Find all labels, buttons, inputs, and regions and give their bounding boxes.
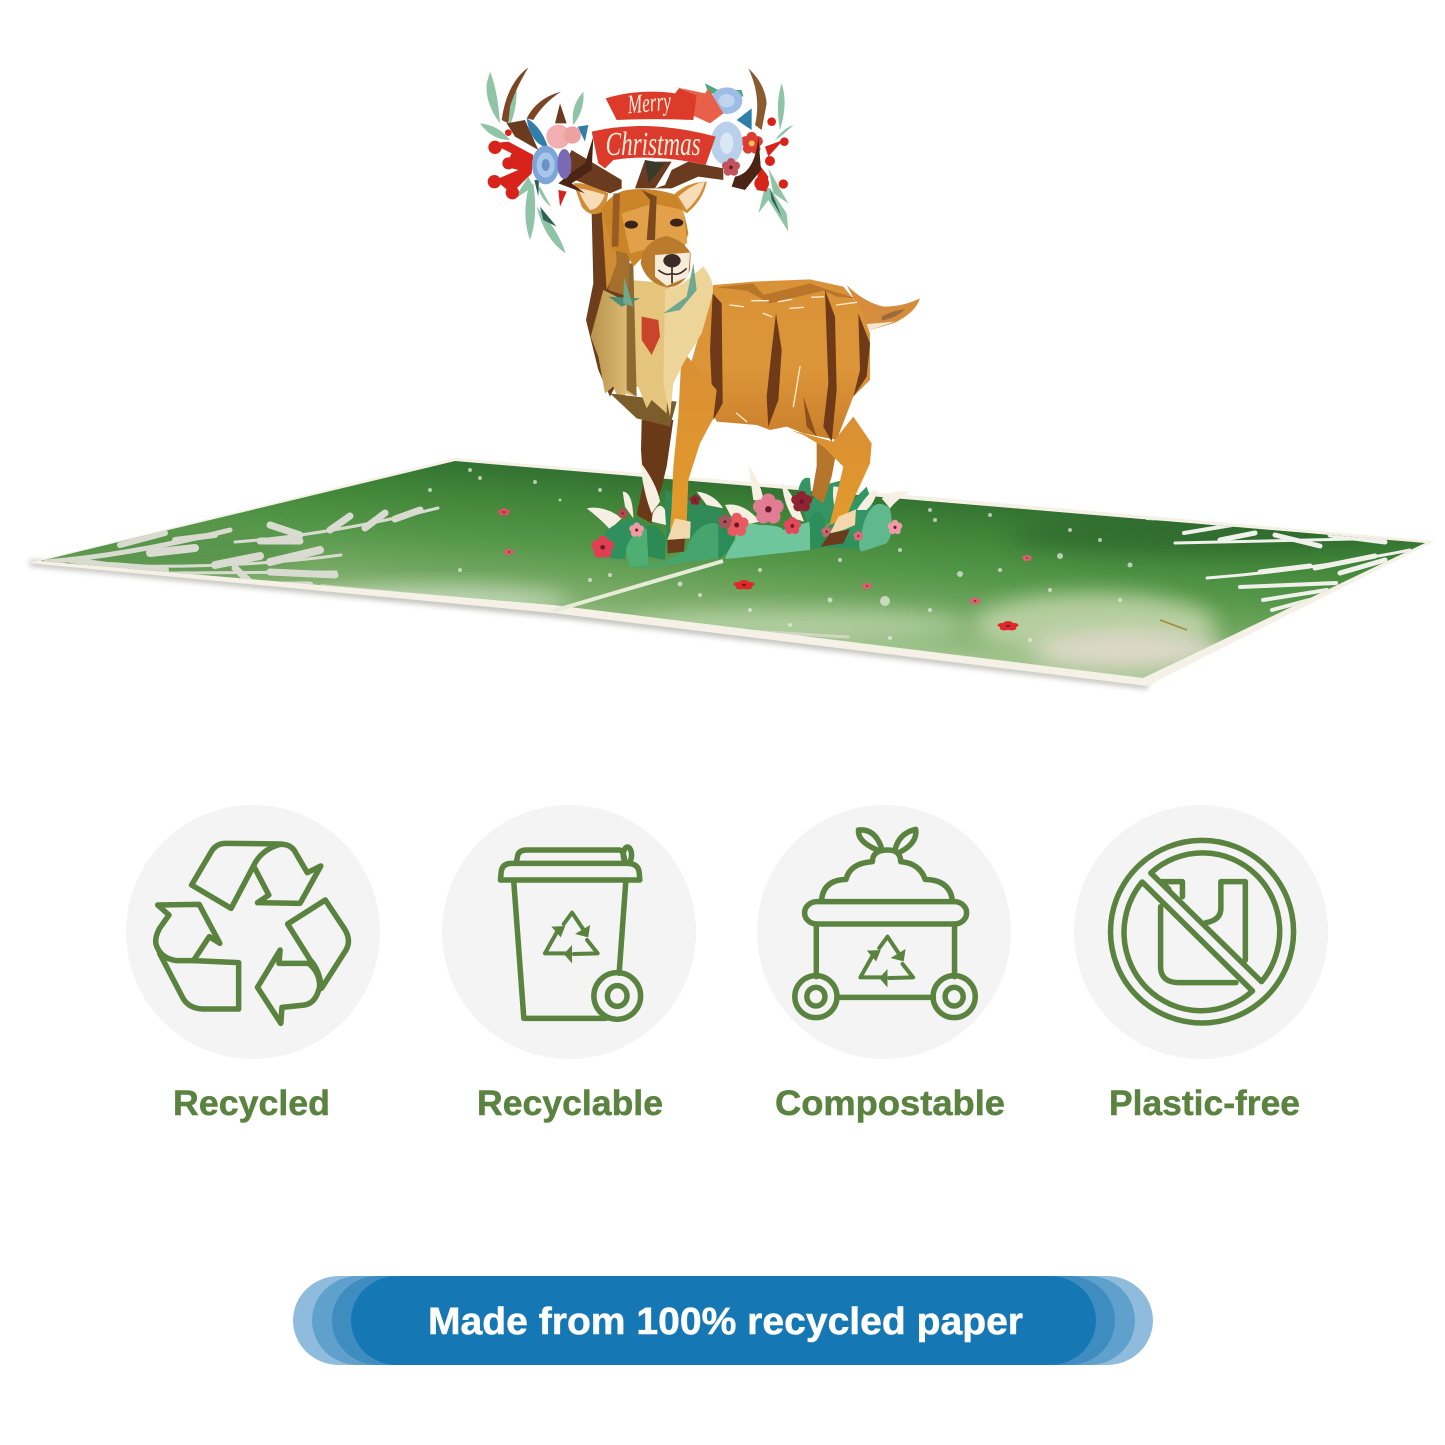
left prong long: [502, 67, 528, 123]
dark patch back right: [1010, 515, 1370, 555]
blue rose right lower: [711, 122, 743, 165]
pink rose left: [546, 125, 581, 149]
back dark bushes: [665, 490, 727, 540]
red berries left: [488, 129, 567, 207]
white spots: [730, 297, 857, 422]
fold slits: [710, 293, 723, 420]
white blade near hoof: [652, 506, 666, 525]
teal main lobe: [725, 522, 810, 559]
upper mid tine: [555, 103, 567, 123]
head fold: [612, 193, 620, 247]
green wash: [40, 461, 1425, 678]
pill layer main: [351, 1276, 1096, 1365]
pale glow on right panel: [973, 593, 1217, 657]
white blade front of far leg: [640, 462, 660, 513]
christmas text: Christmas: [606, 126, 701, 163]
mane cream left: [591, 290, 635, 403]
rear hoof cream: [830, 509, 856, 533]
nose: [663, 254, 681, 267]
ribbon tail: [677, 87, 723, 123]
banner: recycled paper: [293, 1276, 1153, 1365]
pill layer outer: [293, 1276, 1153, 1365]
card paper: [28, 458, 1435, 686]
left antler fork: [507, 120, 538, 150]
green patch left corner: [40, 525, 300, 575]
pale wash near centre: [630, 609, 970, 641]
face fold: [642, 190, 657, 240]
blue rose right top: [705, 83, 743, 114]
dark centre: [645, 160, 665, 183]
dark tines: [732, 137, 761, 190]
pop-up card base: [27, 458, 1434, 692]
right teal lobe: [859, 504, 892, 552]
banner text: Made from 100% recycled paper: [428, 1301, 1023, 1343]
snow dots: [428, 468, 1132, 642]
flowers: [591, 536, 614, 558]
icon: no plastic bag: [1111, 840, 1294, 1023]
pill layer three: [332, 1276, 1115, 1365]
label: Recycled: [173, 1084, 330, 1123]
circle: [757, 805, 1011, 1059]
red berries right: [740, 117, 789, 192]
label: Recyclable: [477, 1084, 663, 1123]
strip behind rear hoof: [825, 530, 863, 548]
label: Plastic-free: [1109, 1084, 1300, 1123]
circle: [442, 805, 696, 1059]
tail: [847, 285, 920, 331]
right pink flower: [722, 158, 740, 176]
chest fold: [627, 263, 637, 397]
far front leg: [637, 420, 673, 523]
right prong: [748, 68, 767, 130]
neck stripe outer: [602, 207, 617, 290]
left leaves: [480, 72, 584, 253]
far legs: [637, 420, 837, 523]
mane dark back: [586, 210, 630, 397]
body: [690, 279, 870, 440]
blue leaves: [527, 118, 548, 148]
ear right inner: [678, 182, 705, 210]
leaves: [608, 297, 640, 307]
circle: [126, 805, 380, 1059]
left dark lobe: [605, 518, 647, 559]
merry banner: [606, 88, 697, 120]
near hoof brown: [667, 539, 685, 553]
ear left inner: [578, 188, 605, 210]
head: [602, 189, 688, 267]
card nick: [1160, 620, 1187, 630]
printed flowers: [498, 508, 1032, 630]
circle: [1074, 805, 1328, 1059]
icon: recycling arrows: [156, 843, 348, 1023]
neck stripe: [608, 207, 630, 297]
near hoof cream: [667, 518, 691, 540]
back white blades: [587, 508, 622, 529]
dark tine left: [558, 137, 593, 193]
rear hoof brown: [821, 529, 850, 547]
tail mark: [882, 309, 905, 321]
mouth: [658, 267, 687, 283]
tail underside: [867, 322, 895, 331]
christmas banner: [592, 126, 716, 168]
teal lobe left: [626, 528, 648, 567]
centre antler tines: [635, 160, 723, 188]
pale wash front left: [310, 586, 570, 614]
card printed scene: [40, 461, 1425, 678]
chest flap centre: [630, 280, 670, 413]
pill layer two: [312, 1276, 1135, 1365]
near hind leg: [790, 417, 872, 527]
dark lobe right: [809, 512, 826, 549]
eyes: [625, 221, 638, 229]
snout white: [655, 253, 690, 286]
icon: compost cart: [795, 829, 975, 1018]
green main lobe: [630, 523, 718, 567]
icon: wheelie bin: [500, 847, 641, 1019]
front foliage: [591, 491, 902, 567]
ear left: [573, 183, 608, 214]
blue rose left: [532, 146, 571, 184]
red flower: [642, 317, 660, 355]
beige patch: [1033, 630, 1223, 670]
label: Compostable: [775, 1084, 1005, 1123]
centre fold: [553, 561, 723, 611]
left prong short: [527, 92, 561, 120]
face light: [622, 203, 687, 253]
garland: [608, 263, 697, 355]
foliage behind legs: [587, 465, 909, 547]
badge: plastic-free: [1074, 805, 1328, 1123]
merry text: Merry: [626, 86, 672, 119]
body slits and white spots: [710, 290, 870, 442]
far hind leg: [812, 440, 837, 503]
snow branches right: [1147, 518, 1410, 610]
card shadow: [30, 560, 1150, 689]
antlers and wreath: [480, 67, 793, 253]
body top lip: [717, 283, 857, 303]
near front leg: [670, 350, 717, 530]
muzzle: [641, 236, 691, 287]
badge: recyclable: [442, 805, 696, 1123]
chest flap right: [663, 267, 713, 417]
ear right: [672, 182, 707, 213]
left antler root: [565, 150, 622, 193]
mane lower shadow: [610, 393, 677, 427]
badge: recycled: [126, 805, 380, 1123]
pop-up deer: [480, 67, 920, 567]
right leaves: [758, 83, 793, 232]
snow branches left: [46, 508, 848, 637]
dark lobe middle: [718, 525, 734, 558]
dark lobe: [647, 525, 666, 560]
badge: compostable: [757, 805, 1011, 1123]
